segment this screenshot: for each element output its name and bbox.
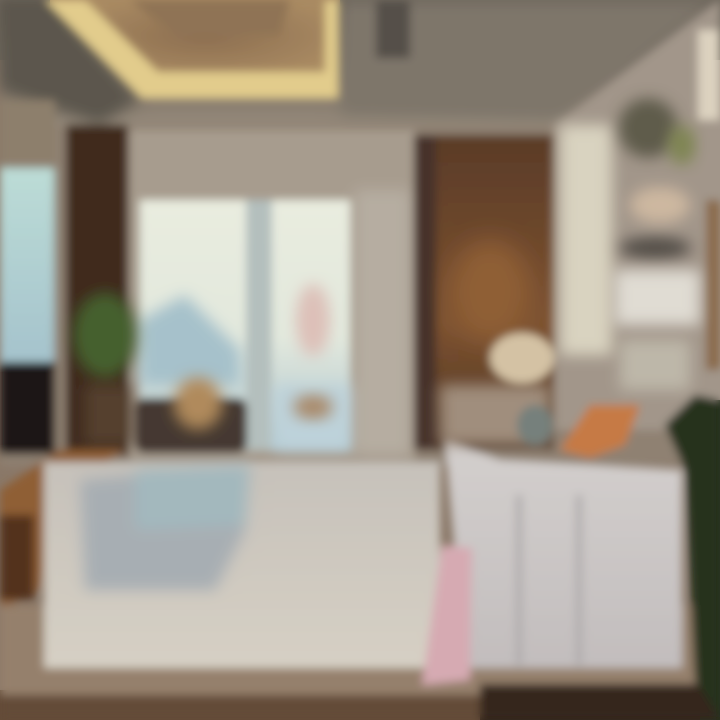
right wall with shelves (555, 0, 720, 430)
potted plant right (665, 395, 720, 720)
television (0, 362, 55, 454)
potted plant left (73, 293, 137, 445)
ceiling (0, 0, 720, 135)
sofa by the window (135, 377, 247, 453)
orange decor items (517, 405, 640, 458)
left wooden counter (0, 450, 125, 610)
white side table (445, 440, 682, 668)
table lamp (440, 333, 554, 445)
dark wooden column (66, 125, 128, 455)
back wall and curtains (0, 125, 720, 465)
ceiling vent (376, 0, 410, 58)
left window (0, 100, 55, 368)
floor (0, 605, 720, 720)
ceiling light panel (45, 0, 338, 98)
main window (140, 200, 350, 450)
large white table (44, 462, 440, 668)
pink cloth (422, 545, 472, 685)
wood wall panel (414, 135, 554, 450)
blue glass tray on table (80, 465, 250, 590)
